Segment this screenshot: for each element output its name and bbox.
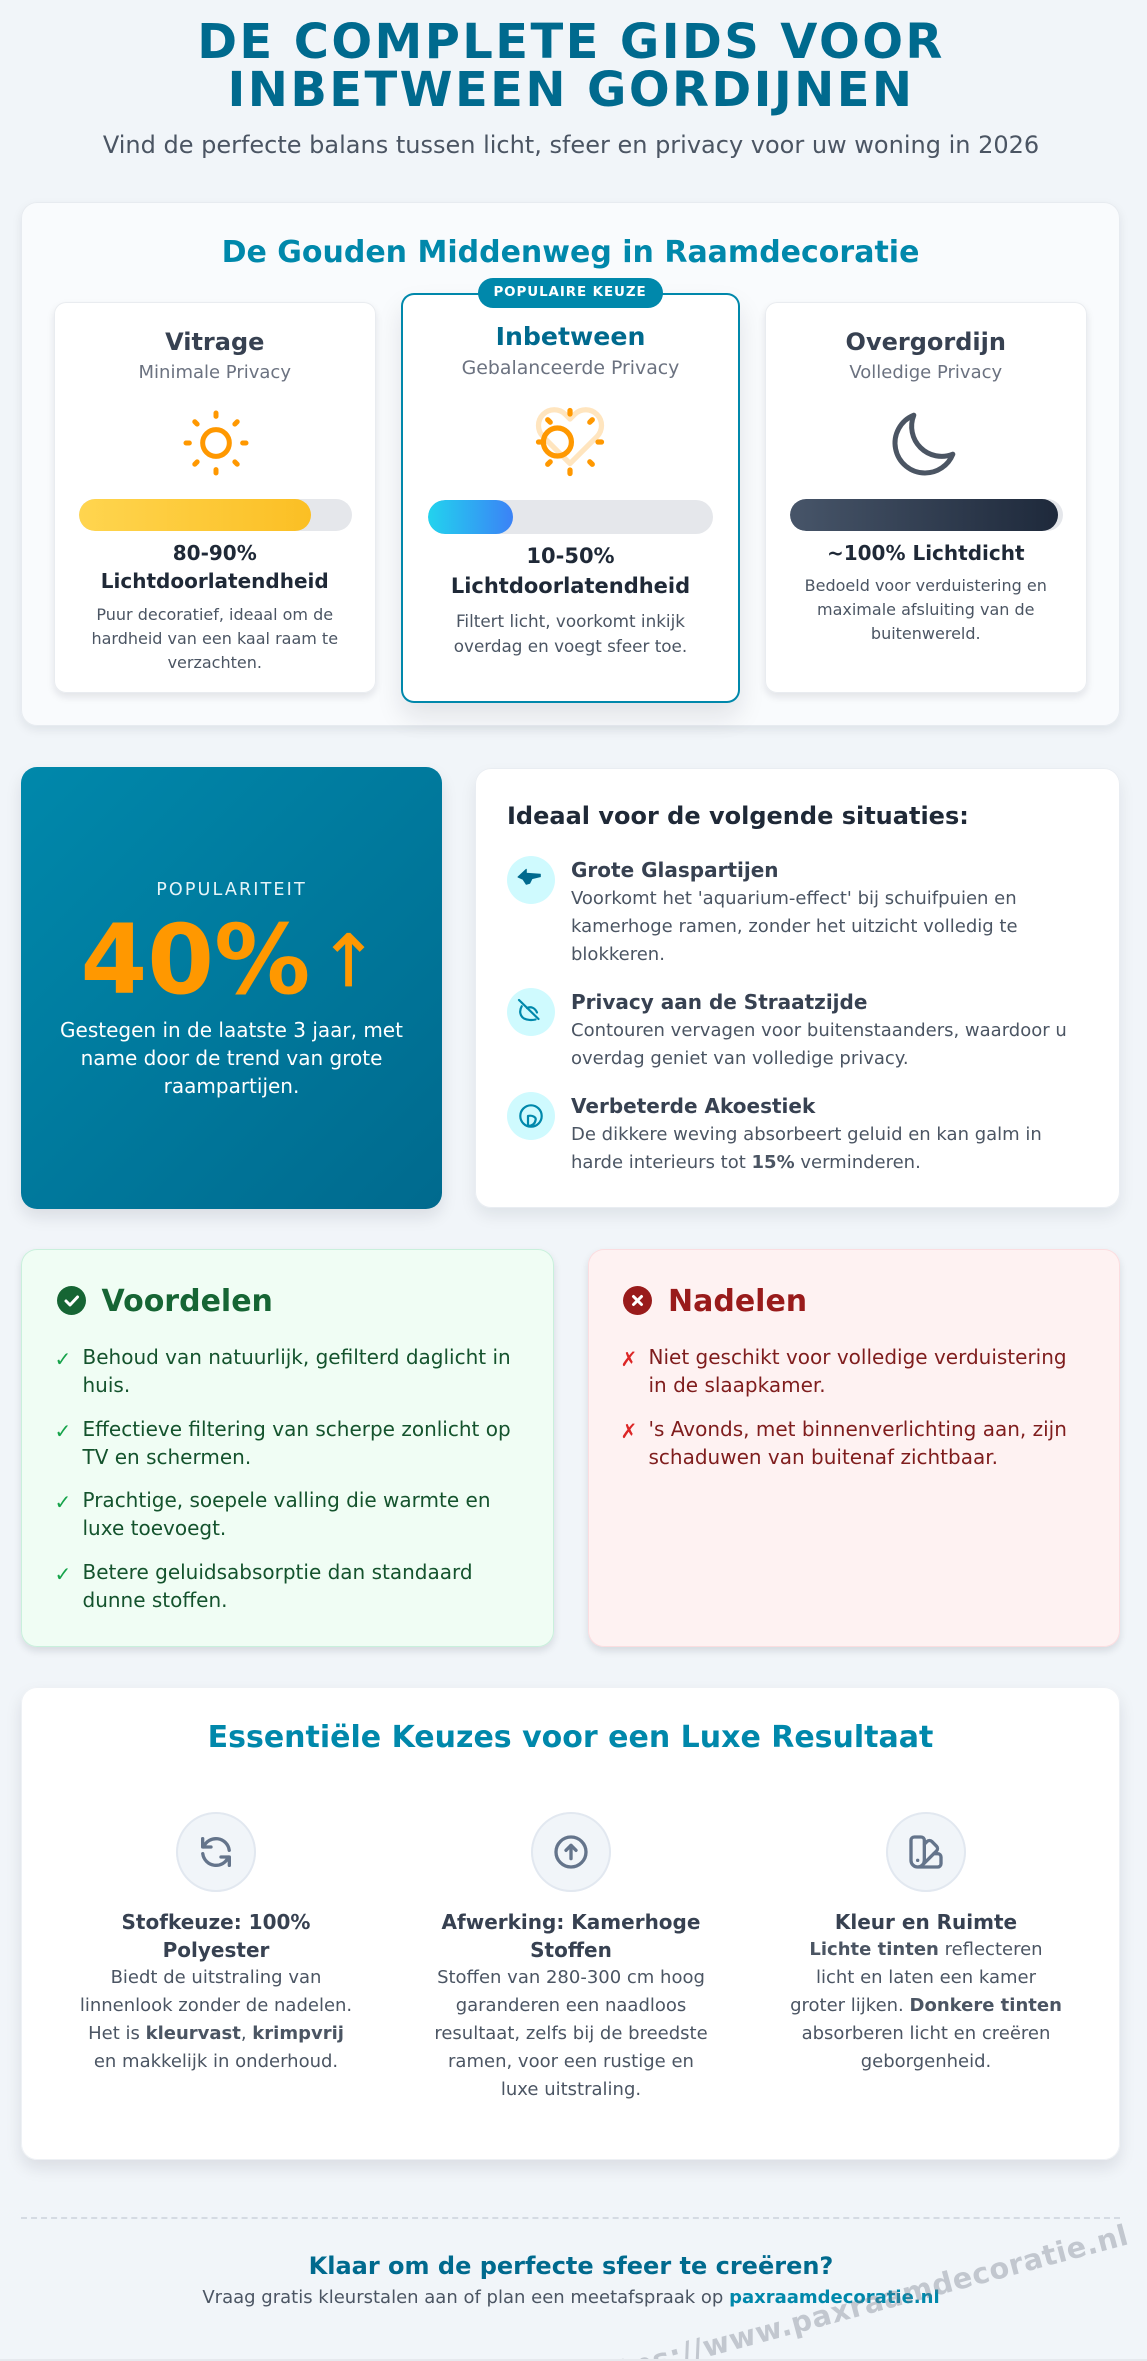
value: ~100% Lichtdicht bbox=[827, 541, 1025, 565]
choice: stofkeuze: Stofkeuze: 100% bbox=[122, 1910, 310, 1934]
card: overgordijn bbox=[765, 302, 1086, 693]
value: Lichtdoorlatendheid bbox=[101, 569, 329, 593]
footer text: Vraag gratis kleurstalen aan of plan een meetafspraak op paxraamdecoratie.nl bbox=[202, 2287, 940, 2308]
list item: Effectieve filtering van scherpe zonlicht op bbox=[82, 1417, 511, 1441]
list item: ✗ bbox=[620, 1419, 637, 1443]
bottom strip bbox=[0, 2359, 1147, 2361]
badge: populaire keuze bbox=[478, 278, 662, 308]
label: POPULARITEIT bbox=[156, 880, 307, 900]
list item bbox=[54, 1560, 473, 1612]
heading: Nadelen bbox=[668, 1284, 807, 1318]
list item: 's Avonds, met binnenverlichting aan, zijn bbox=[648, 1417, 1067, 1441]
item text: blokkeren. bbox=[571, 944, 665, 964]
list item: ✓ bbox=[54, 1347, 71, 1371]
item text: overdag geniet van volledige privacy. bbox=[571, 1048, 909, 1068]
heading: Essentiële Keuzes voor een Luxe Resultaat bbox=[208, 1720, 933, 1755]
light bar: 30% bbox=[428, 500, 712, 534]
choice: afwerking: garanderen een naadloos bbox=[456, 1995, 686, 2016]
choice: afwerking: Stoffen van 280-300 cm hoog bbox=[437, 1967, 705, 1988]
description: buitenwereld. bbox=[871, 624, 981, 643]
description: Bedoeld voor verduistering en bbox=[805, 576, 1047, 595]
list item bbox=[620, 1345, 1067, 1397]
heading: de gouden middenweg: De Gouden Middenweg in Raamdecoratie bbox=[222, 234, 919, 270]
description bbox=[91, 605, 338, 672]
card title: Inbetween bbox=[496, 322, 645, 351]
title: INBETWEEN GORDIJNEN bbox=[227, 62, 914, 118]
item title: Grote Glaspartijen bbox=[571, 858, 779, 882]
choice: kleur en ruimte: groter lijken. Donkere tinten bbox=[790, 1995, 1062, 2016]
description: Filtert licht, voorkomt inkijk bbox=[456, 610, 685, 630]
panel: populariteit bbox=[21, 767, 442, 1209]
choice: stofkeuze: Polyester bbox=[163, 1938, 269, 1962]
item title: Verbeterde Akoestiek bbox=[571, 1094, 815, 1118]
panel: de gouden middenweg bbox=[21, 202, 1120, 726]
choice: kleur en ruimte: licht en laten een kamer bbox=[816, 1967, 1036, 1988]
list item: Niet geschikt voor volledige verduistering bbox=[648, 1345, 1067, 1369]
choice: afwerking: Afwerking: Kamerhoge bbox=[442, 1910, 700, 1934]
panel: essentiele keuzes bbox=[21, 1687, 1120, 2160]
stat description: name door de trend van grote bbox=[81, 1046, 382, 1070]
value bbox=[451, 544, 690, 598]
card subtitle: Minimale Privacy bbox=[138, 362, 291, 383]
choice: stofkeuze bbox=[80, 1910, 352, 2072]
list item bbox=[54, 1345, 511, 1397]
list item: in de slaapkamer. bbox=[648, 1373, 826, 1397]
icon: glass bbox=[507, 856, 555, 904]
stat description bbox=[60, 1018, 403, 1098]
list item: schaduwen van buitenaf zichtbaar. bbox=[648, 1445, 998, 1469]
icon: refresh bbox=[176, 1812, 256, 1892]
choice: afwerking: ramen, voor een rustige en bbox=[448, 2051, 694, 2072]
value: 80-90% bbox=[173, 541, 257, 565]
icon: arrow up circle bbox=[531, 1812, 611, 1892]
card title: Vitrage bbox=[165, 328, 264, 356]
title bbox=[197, 14, 945, 118]
value: 10-50% bbox=[526, 544, 615, 568]
list item bbox=[620, 1417, 1067, 1469]
stat description: Gestegen in de laatste 3 jaar, met bbox=[60, 1018, 403, 1042]
icon: moon bbox=[892, 412, 956, 476]
light bar: 99% bbox=[790, 499, 1062, 531]
list item bbox=[54, 1488, 491, 1540]
panel: ideaal voor situaties bbox=[475, 768, 1120, 1208]
choice: stofkeuze: en makkelijk in onderhoud. bbox=[94, 2051, 338, 2072]
description: overdag en voegt sfeer toe. bbox=[454, 636, 687, 656]
card: vitrage bbox=[54, 302, 376, 693]
list item: luxe toevoegt. bbox=[82, 1516, 226, 1540]
panel: voordelen bbox=[21, 1249, 554, 1647]
choice: kleur en ruimte: geborgenheid. bbox=[861, 2051, 991, 2072]
item text bbox=[571, 1020, 1067, 1068]
item text: Contouren vervagen voor buitenstaanders, waardoor u bbox=[571, 1020, 1067, 1040]
light bar: 85% bbox=[78, 499, 352, 531]
divider bbox=[21, 2217, 1120, 2219]
heading: Ideaal voor de volgende situaties: bbox=[507, 802, 969, 830]
title: DE COMPLETE GIDS VOOR bbox=[197, 14, 945, 70]
card title: Overgordijn bbox=[846, 328, 1006, 356]
description: Puur decoratief, ideaal om de bbox=[96, 605, 333, 624]
list item: Prachtige, soepele valling die warmte en bbox=[82, 1488, 491, 1512]
list item bbox=[54, 1417, 511, 1469]
card: inbetween (popular) bbox=[401, 293, 740, 703]
card subtitle: Volledige Privacy bbox=[849, 362, 1002, 383]
item text: kamerhoge ramen, zonder het uitzicht volledig te bbox=[571, 916, 1018, 936]
choice: afwerking: Stoffen bbox=[530, 1938, 612, 1962]
list item: ✓ bbox=[54, 1419, 71, 1443]
subtitle: Vind de perfecte balans tussen licht, sfeer en privacy voor uw woning in 2026 bbox=[103, 131, 1039, 159]
badge: populaire keuze: POPULAIRE KEUZE bbox=[493, 285, 647, 300]
list item: TV en schermen. bbox=[82, 1445, 251, 1469]
choice: stofkeuze: Het is kleurvast, krimpvrij bbox=[88, 2023, 344, 2044]
value: Lichtdoorlatendheid bbox=[451, 574, 690, 598]
choice: kleur en ruimte: Kleur en Ruimte bbox=[835, 1910, 1017, 1934]
choice: stofkeuze: Biedt de uitstraling van bbox=[111, 1967, 321, 1988]
list item: ✗ bbox=[620, 1347, 637, 1371]
big stat: 40%: 40% bbox=[80, 904, 310, 1016]
list item: Betere geluidsabsorptie dan standaard bbox=[82, 1560, 473, 1584]
panel: nadelen bbox=[588, 1249, 1120, 1647]
list item: ✓ bbox=[54, 1562, 71, 1586]
choice: kleur en ruimte: absorberen licht en creëren bbox=[802, 2023, 1050, 2044]
description: hardheid van een kaal raam te bbox=[91, 629, 338, 648]
item text: harde interieurs tot 15% verminderen. bbox=[571, 1152, 921, 1172]
choice: kleur en ruimte bbox=[790, 1910, 1062, 2072]
value bbox=[101, 541, 329, 593]
heading: Voordelen bbox=[102, 1284, 273, 1318]
item text: De dikkere weving absorbeert geluid en kan galm in bbox=[571, 1124, 1042, 1144]
choice: stofkeuze: linnenlook zonder de nadelen. bbox=[80, 1995, 352, 2016]
item title: Privacy aan de Straatzijde bbox=[571, 990, 867, 1014]
item text: Voorkomt het 'aquarium-effect' bij schuifpuien en bbox=[571, 888, 1017, 908]
icon: x circle bbox=[623, 1286, 652, 1315]
icon: sun bbox=[184, 410, 248, 476]
arrow: up: ↑ bbox=[318, 919, 379, 1003]
list item: Behoud van natuurlijk, gefilterd daglicht in bbox=[82, 1345, 511, 1369]
description: maximale afsluiting van de bbox=[817, 600, 1034, 619]
card subtitle: Gebalanceerde Privacy bbox=[462, 357, 679, 379]
stat description: raampartijen. bbox=[164, 1074, 299, 1098]
icon: privacy bbox=[507, 988, 555, 1036]
icon: sun and heart bbox=[536, 407, 604, 476]
list item: huis. bbox=[82, 1373, 130, 1397]
choice: afwerking: luxe uitstraling. bbox=[501, 2079, 641, 2100]
icon: swatch book bbox=[886, 1812, 966, 1892]
description bbox=[454, 610, 687, 656]
footer heading: Klaar om de perfecte sfeer te creëren? bbox=[309, 2252, 833, 2280]
description bbox=[805, 576, 1047, 643]
description: verzachten. bbox=[168, 653, 262, 672]
item text bbox=[571, 888, 1018, 964]
choice: afwerking: resultaat, zelfs bij de breedste bbox=[434, 2023, 708, 2044]
choice: kleur en ruimte: Lichte tinten reflecteren bbox=[809, 1939, 1043, 1960]
icon: check circle bbox=[57, 1286, 86, 1315]
icon: acoustics bbox=[507, 1092, 555, 1140]
list item: dunne stoffen. bbox=[82, 1588, 228, 1612]
list item: ✓ bbox=[54, 1490, 71, 1514]
item text bbox=[571, 1124, 1042, 1172]
choice: afwerking bbox=[434, 1910, 708, 2100]
